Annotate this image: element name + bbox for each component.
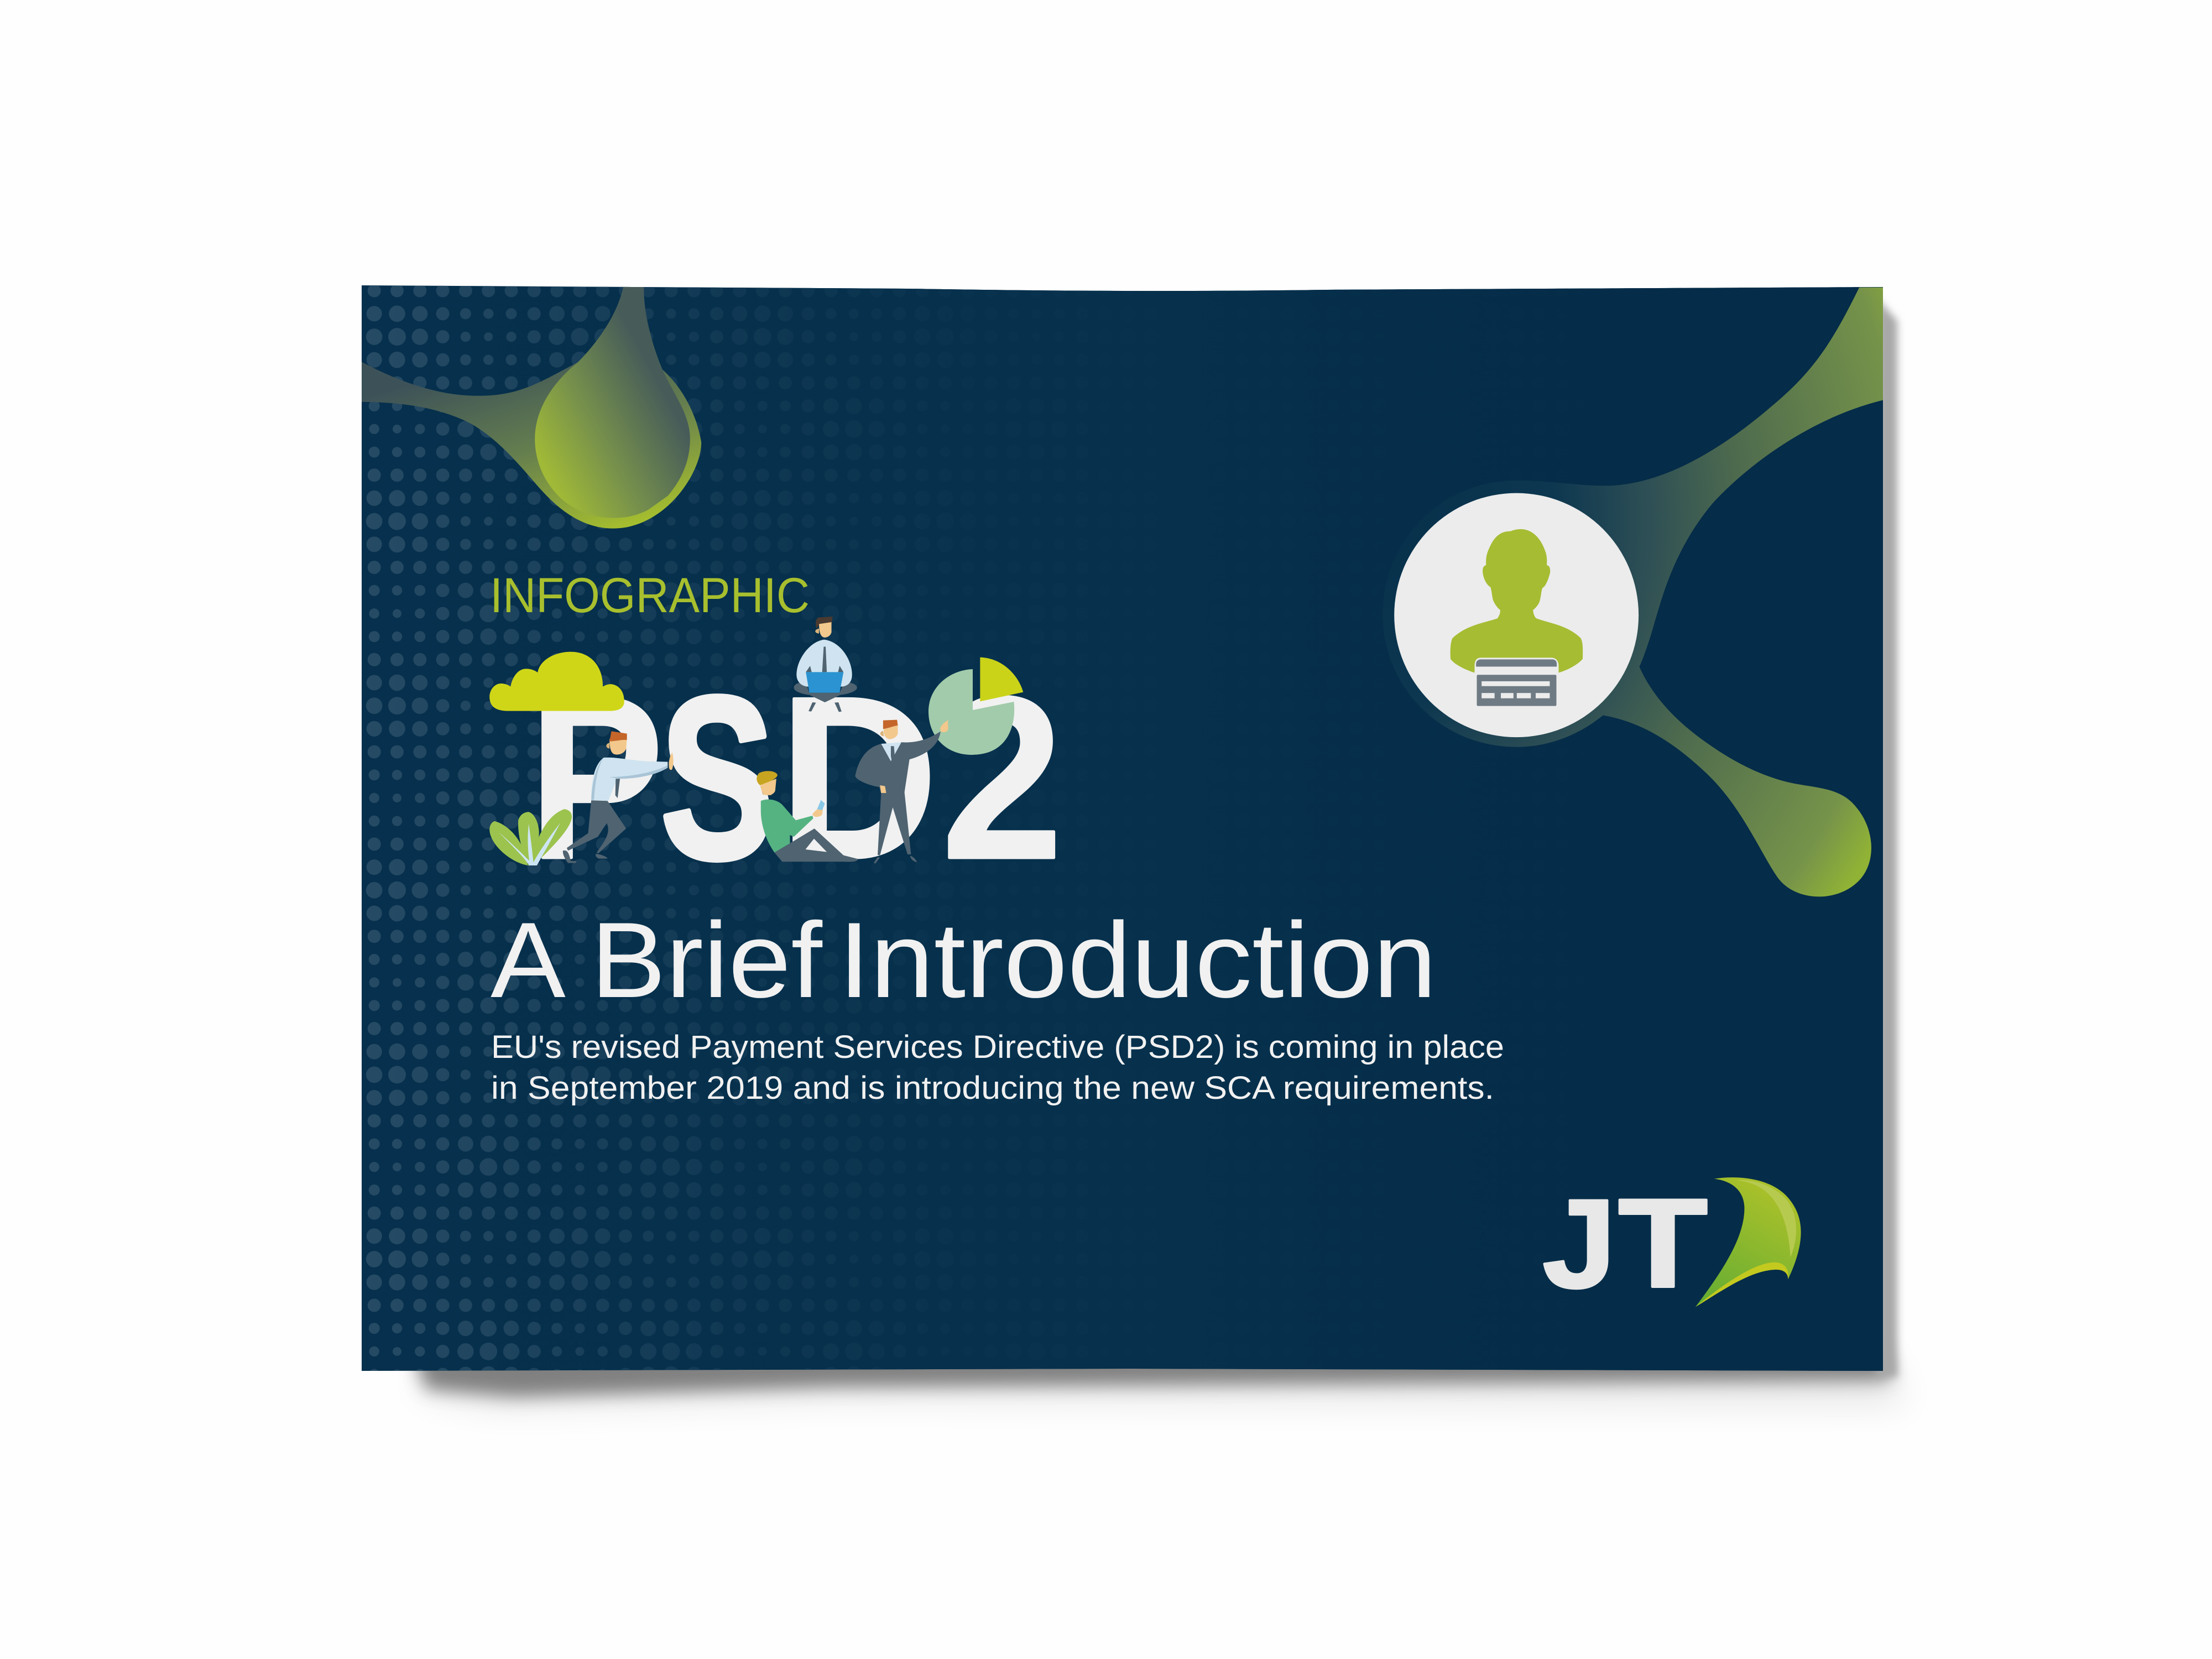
- PSD2 big lettering: [529, 648, 1063, 907]
- halftone dot pattern: [362, 279, 1888, 1377]
- top-left green droplet: [354, 285, 701, 529]
- cover card: [354, 276, 1891, 1383]
- heading: A Brief Introduction: A Brief: [491, 900, 823, 1020]
- drop shadow: [412, 299, 1908, 1407]
- circle icon: person with payment card: [1394, 493, 1639, 737]
- logo wordmark: J: [1542, 1172, 1616, 1314]
- brochure mockup: [362, 285, 1907, 1416]
- seated man with phone: [757, 771, 858, 862]
- plant: [489, 809, 572, 865]
- intro paragraph: in September 2019 and is introducing the new SCA requirements.: [491, 1070, 1494, 1106]
- logo wordmark: T: [1618, 1172, 1708, 1314]
- PSD2 big lettering: S: [660, 648, 774, 907]
- seated man with laptop: [794, 617, 857, 712]
- person silhouette: [1451, 529, 1583, 673]
- payment card: [1476, 659, 1557, 706]
- man in suit pointing at chart: [855, 720, 948, 864]
- pie chart: [928, 658, 1023, 755]
- PSD2 big lettering: D: [779, 649, 938, 907]
- JT logo: [1542, 1172, 1801, 1314]
- heading: A Brief Introduction: [491, 900, 1437, 1020]
- label: INFOGRAPHIC: INFOGRAPHIC: [490, 567, 810, 623]
- logo sail: [1695, 1177, 1801, 1307]
- logo wordmark: [1542, 1172, 1708, 1314]
- icon circle: [1394, 493, 1639, 737]
- PSD2 big lettering: 2: [942, 649, 1063, 907]
- man pushing the P: [563, 731, 674, 863]
- cloud: [489, 652, 624, 711]
- heading: A Brief Introduction: Introduction: [838, 900, 1437, 1020]
- card background: [354, 276, 1891, 1383]
- PSD2 big lettering: P: [529, 649, 664, 907]
- intro paragraph: [491, 1029, 1504, 1106]
- right green blob: [1383, 288, 1890, 896]
- intro paragraph: EU's revised Payment Services Directive (PSD2) is coming in place: [491, 1029, 1504, 1065]
- PSD2 illustration figures: [489, 617, 1023, 865]
